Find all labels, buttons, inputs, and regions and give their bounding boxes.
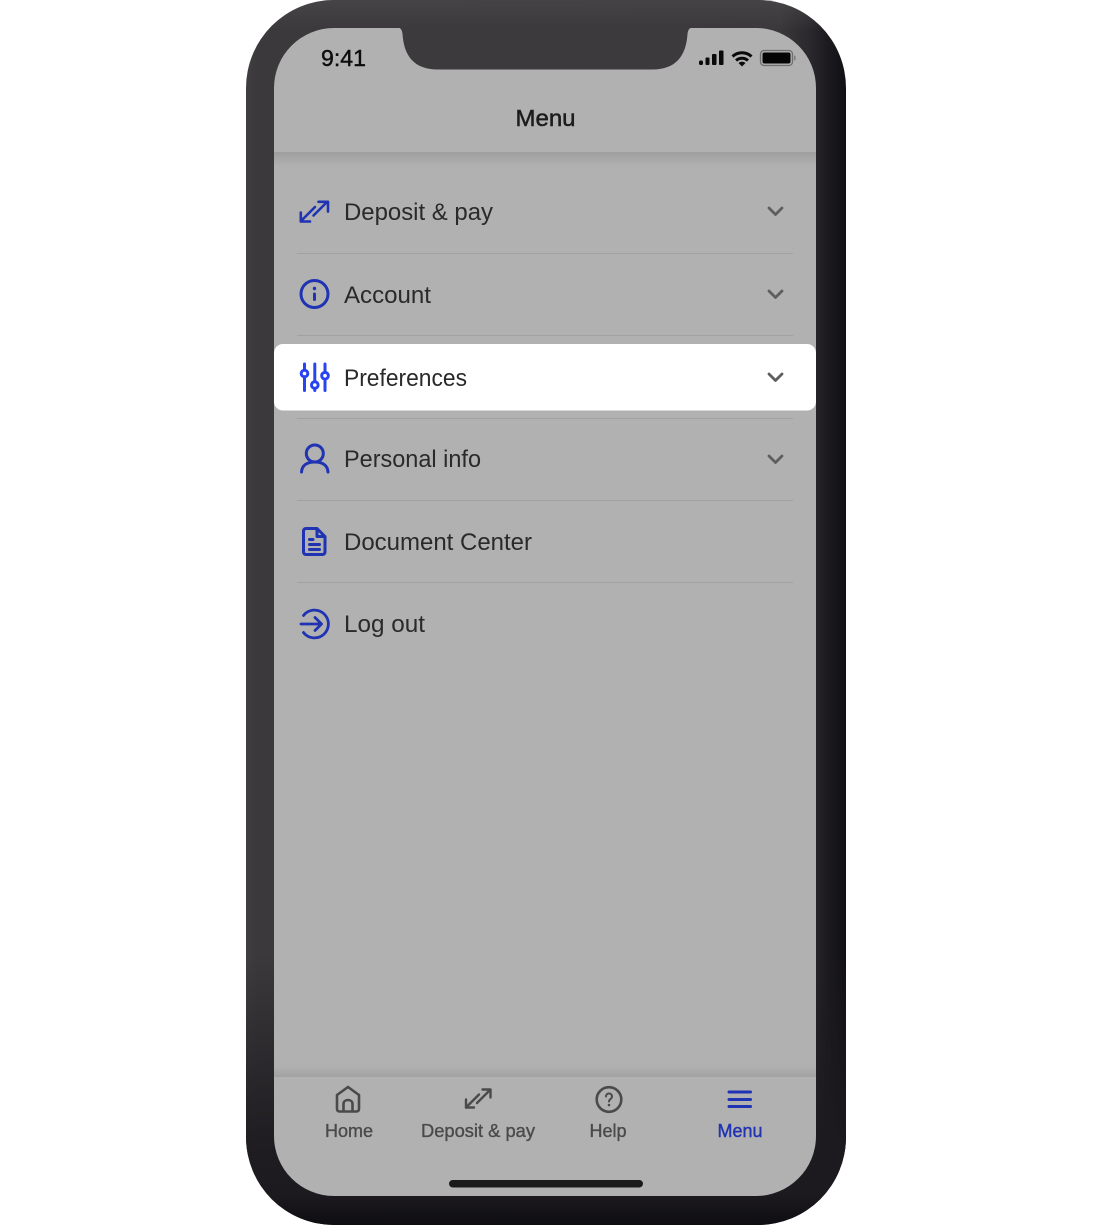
tab: Help: Help bbox=[590, 1121, 626, 1141]
page title: Menu bbox=[516, 105, 576, 131]
menu row: Account: Account bbox=[344, 282, 431, 309]
tab: Home: Home bbox=[325, 1121, 373, 1141]
menu row: Deposit & pay bbox=[301, 199, 782, 226]
icon: document bbox=[304, 528, 325, 554]
icon: signal bbox=[699, 50, 724, 65]
tab: Deposit & pay: Deposit & pay bbox=[421, 1121, 535, 1141]
menu row: Document Center: Document Center bbox=[344, 529, 532, 556]
status icons bbox=[699, 50, 796, 66]
chevron bbox=[769, 374, 782, 380]
icon: help circle bbox=[597, 1087, 621, 1112]
row dividers bbox=[297, 253, 793, 583]
highlight panel bbox=[274, 344, 816, 410]
menu row: Personal info bbox=[302, 445, 782, 473]
notch bbox=[397, 27, 693, 70]
menu row: Account bbox=[301, 280, 782, 309]
tab: Home bbox=[325, 1087, 373, 1141]
phone frame bbox=[246, 0, 846, 1225]
icon: home bbox=[337, 1087, 359, 1112]
tab bar bbox=[325, 1087, 762, 1141]
tab: Deposit & pay bbox=[421, 1090, 535, 1141]
status time: 9:41 bbox=[321, 45, 366, 71]
menu row: Preferences (highlighted) bbox=[274, 344, 816, 410]
icon: log out bbox=[301, 610, 328, 638]
menu row: Personal info: Personal info bbox=[344, 446, 481, 473]
menu row: Log out: Log out bbox=[344, 611, 425, 638]
chevron bbox=[769, 291, 782, 298]
chevron bbox=[769, 456, 782, 462]
icon: person bbox=[302, 445, 328, 472]
icon: wifi bbox=[732, 53, 752, 66]
phone screen bbox=[274, 27, 816, 1196]
icon: info circle bbox=[301, 280, 328, 308]
tab: Help bbox=[590, 1087, 626, 1141]
icon: battery bbox=[760, 50, 796, 66]
chevron bbox=[769, 208, 782, 214]
menu row: Deposit & pay: Deposit & pay bbox=[344, 199, 493, 226]
home indicator bbox=[449, 1180, 643, 1188]
icon: deposit arrows bbox=[466, 1090, 490, 1108]
tab: Menu (active): Menu bbox=[718, 1121, 762, 1141]
phone mockup bbox=[246, 0, 846, 1225]
icon: hamburger bbox=[729, 1092, 750, 1106]
menu row: Log out bbox=[301, 610, 425, 638]
icon: deposit arrows bbox=[301, 202, 328, 222]
icon: sliders bbox=[301, 364, 328, 390]
menu row: Preferences (highlighted): Preferences bbox=[344, 365, 467, 392]
tab: Menu (active) bbox=[718, 1092, 762, 1141]
